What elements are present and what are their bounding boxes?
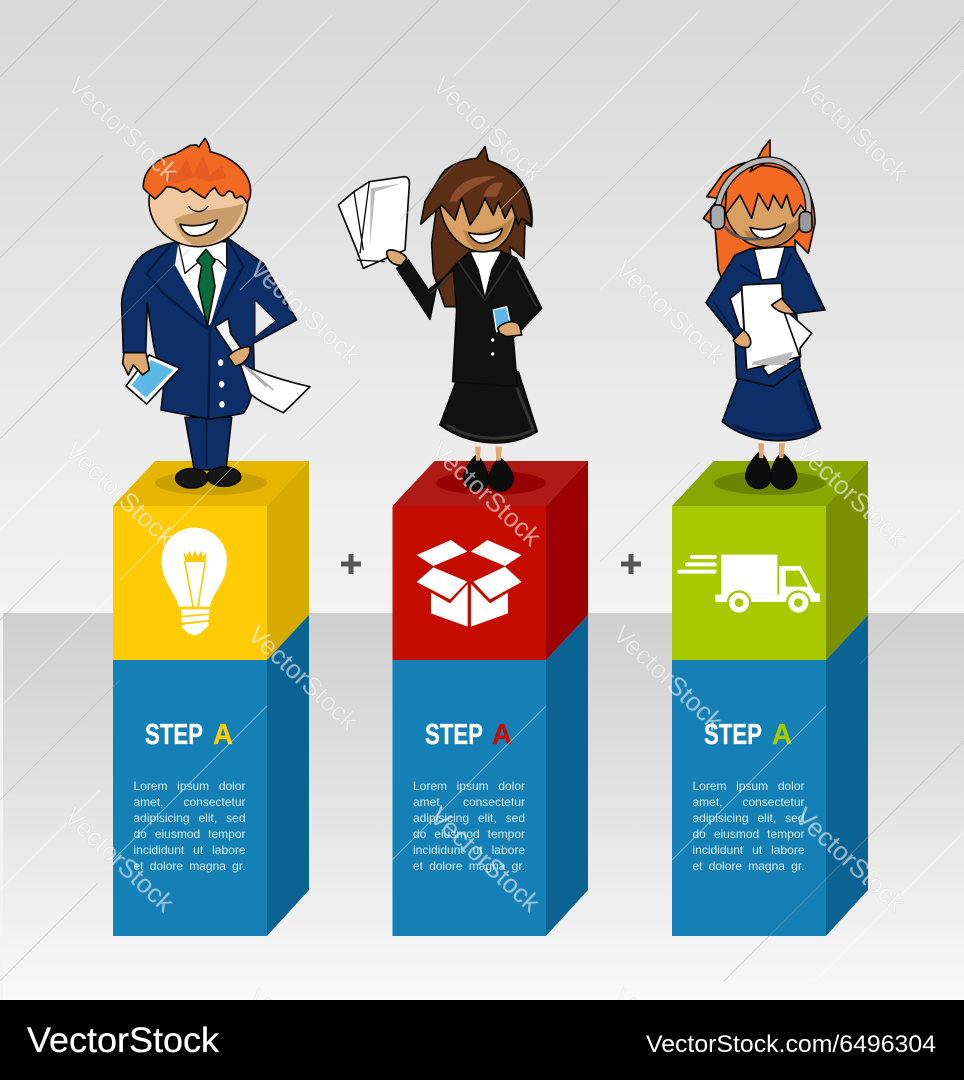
step heading 1: A (213, 719, 233, 751)
watermarks: VectorStock (792, 70, 915, 187)
left hand (733, 330, 751, 347)
lapels (147, 240, 243, 419)
character: woman with headset (703, 140, 825, 489)
jacket (706, 247, 825, 387)
legs (475, 447, 502, 461)
text block: step 1: adipisicing elit, sed (134, 811, 246, 825)
plus sign 1 (341, 554, 361, 574)
headset ear cups (711, 205, 725, 229)
hair front (421, 147, 532, 225)
face (440, 187, 517, 252)
shirt (470, 251, 502, 298)
text block: step 3: Lorem ipsum dolor (692, 779, 804, 793)
watermarks: VectorStock (609, 253, 732, 370)
buttons (491, 338, 494, 356)
long hair behind (703, 161, 815, 300)
mouth (750, 223, 786, 239)
watermarks: VectorStock (424, 801, 547, 918)
background wall (0, 0, 964, 613)
long hair behind (425, 162, 532, 310)
plus sign 2 (621, 554, 641, 574)
text block: step 2: Lorem ipsum dolor (413, 779, 525, 793)
text block: step 3: adipisicing elit, sed (692, 811, 804, 825)
watermarks: VectorStock (58, 801, 181, 918)
phone (493, 307, 511, 332)
hair front (725, 166, 807, 218)
text block: step 1: et dolore magna gr. (134, 859, 246, 873)
shoes (176, 467, 241, 488)
watermarks: VectorStock (607, 619, 730, 736)
jacket (122, 238, 297, 419)
tie (197, 249, 215, 327)
step heading 2: STEP (425, 719, 483, 751)
front paper (742, 283, 800, 370)
step heading 3: A (772, 719, 792, 751)
skirt (440, 372, 537, 443)
column 2 block (392, 461, 588, 936)
text block: step 2: incididunt ut labore (413, 843, 525, 857)
papers (338, 177, 409, 268)
text block: step 2 (413, 779, 525, 873)
footer logo: VectorStock (27, 1021, 220, 1060)
hand holding paper (228, 347, 250, 366)
text block: step 2: et dolore magna gr. (413, 859, 525, 873)
character: woman with papers (338, 147, 542, 491)
raised hand (387, 250, 407, 265)
legs (758, 443, 785, 458)
shirt (754, 247, 785, 280)
right hand (772, 298, 795, 314)
column 3 block (672, 461, 868, 936)
jacket buttons (218, 359, 225, 408)
headset microphone (725, 227, 763, 239)
watermarks: VectorStock (790, 435, 913, 552)
watermarks: VectorStock (244, 253, 367, 370)
text block: step 2: adipisicing elit, sed (413, 811, 525, 825)
step heading 3: STEP (704, 719, 762, 751)
text block: step 1: amet, consectetur (134, 795, 246, 809)
text block: step 3: do eiusmod tempor (692, 827, 804, 841)
tablet (126, 355, 180, 404)
background floor (0, 613, 964, 1000)
text block: step 3: et dolore magna gr. (692, 859, 804, 873)
hand holding tablet (123, 353, 149, 375)
mouth (469, 228, 502, 243)
legs (185, 417, 232, 470)
text block: step 3 (692, 779, 804, 873)
text block: step 1: do eiusmod tempor (134, 827, 246, 841)
text block: step 1 (134, 779, 246, 873)
hand with phone (498, 322, 522, 337)
watermarks: VectorStock (62, 70, 185, 187)
mouth (180, 220, 217, 236)
icon: light bulb (162, 528, 227, 636)
watermarks: VectorStock (425, 435, 548, 552)
step heading 1: STEP (145, 719, 203, 751)
paper roll (215, 318, 244, 357)
shirt (175, 242, 227, 327)
text block: step 1: incididunt ut labore (134, 843, 246, 857)
step heading 2: A (492, 719, 512, 751)
skirt (722, 368, 821, 441)
text block: step 1: Lorem ipsum dolor (134, 779, 246, 793)
paper sheet (240, 363, 310, 413)
back paper (730, 289, 812, 376)
footer bar (0, 1000, 964, 1080)
watermarks: VectorStock (789, 801, 912, 918)
face (149, 157, 248, 247)
text block: step 3: amet, consectetur (692, 795, 804, 809)
face (725, 187, 806, 247)
character: businessman (122, 138, 310, 488)
watermarks: VectorStock (59, 435, 182, 552)
shoes (464, 455, 513, 491)
text block: step 3: incididunt ut labore (692, 843, 804, 857)
footer image id: VectorStock.com/6496304 (646, 1031, 936, 1058)
column 1 block (113, 461, 309, 936)
text block: step 2: amet, consectetur (413, 795, 525, 809)
hair (143, 138, 251, 203)
headset band (717, 160, 809, 225)
text block: step 2: do eiusmod tempor (413, 827, 525, 841)
watermarks: VectorStock (242, 619, 365, 736)
icon: open box (417, 540, 522, 627)
shoes (746, 452, 797, 489)
watermarks: VectorStock (427, 70, 550, 187)
jacket (397, 252, 542, 387)
icon: delivery truck (677, 555, 820, 615)
